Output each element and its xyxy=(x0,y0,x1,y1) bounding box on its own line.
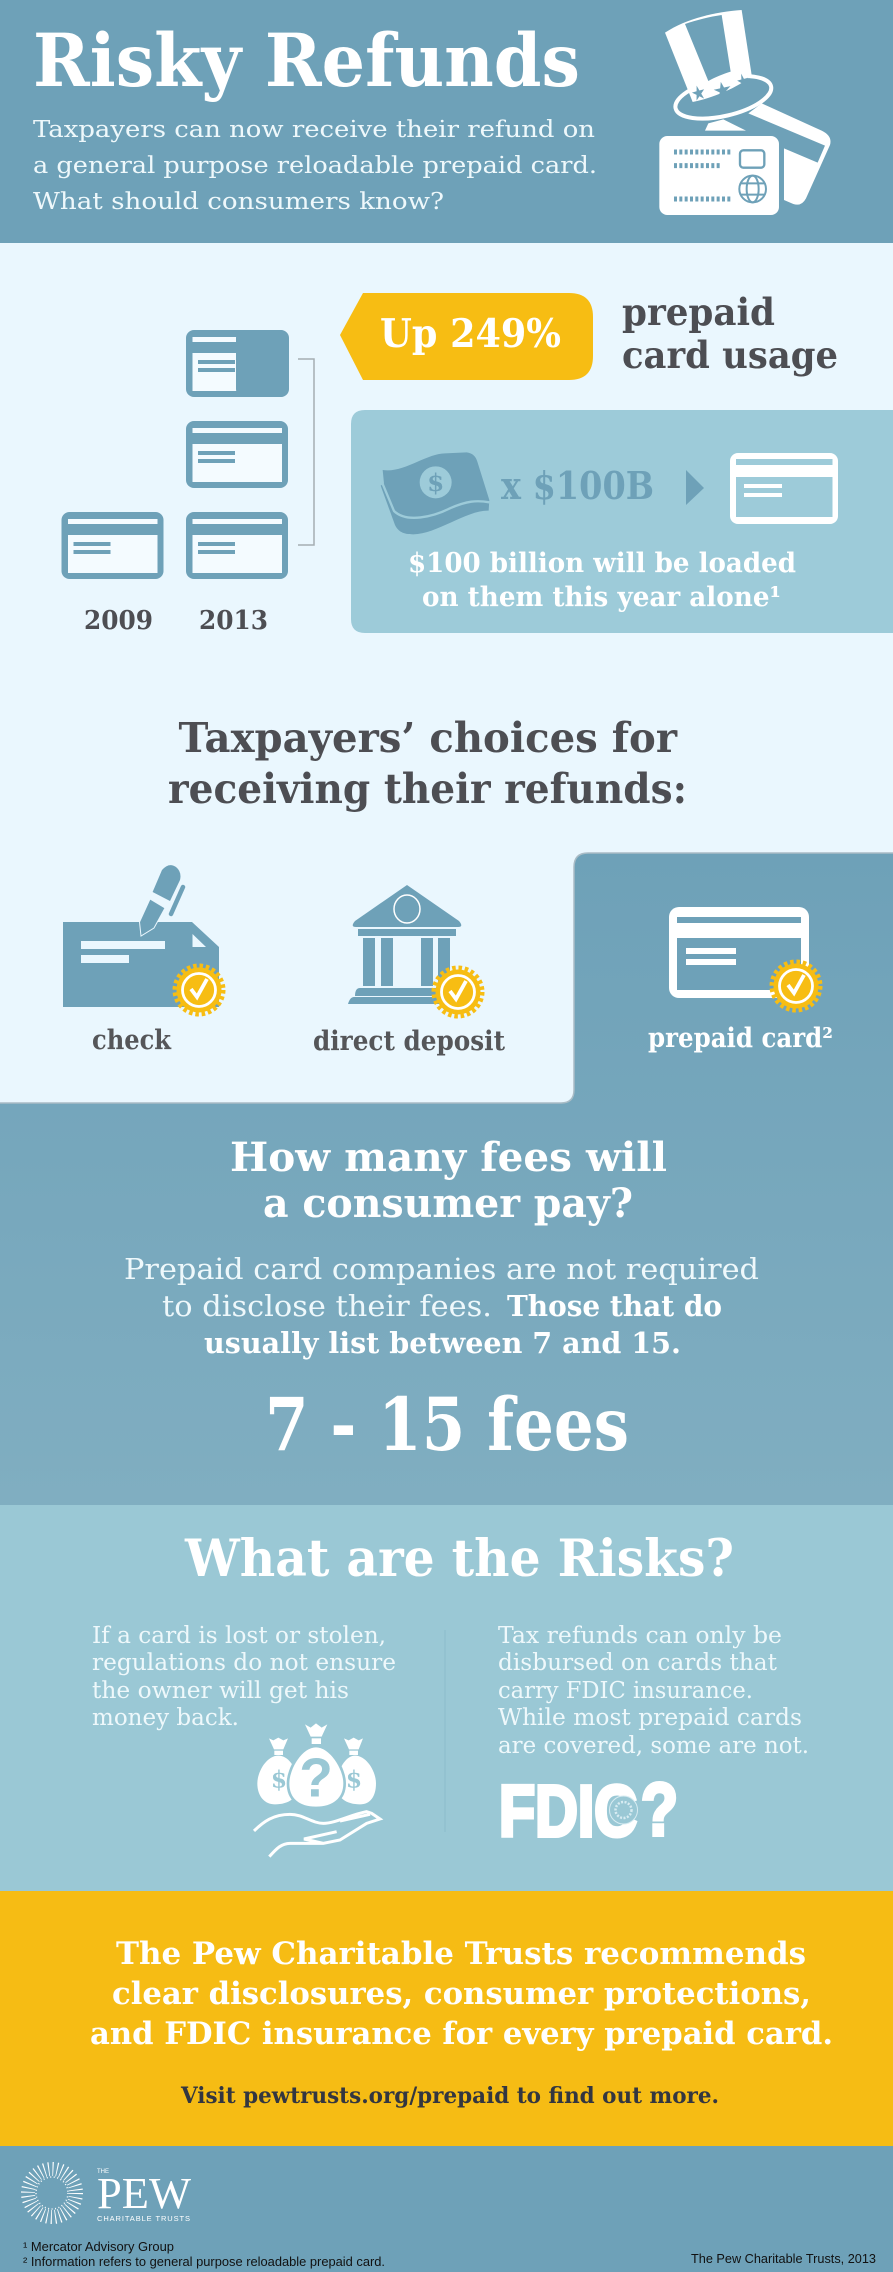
text: fdic insurance: Tax refunds can only be xyxy=(498,1623,782,1649)
panel: footer xyxy=(0,2146,893,2272)
text: fdic insurance: disbursed on cards that xyxy=(498,1650,778,1676)
panel: risks xyxy=(0,1505,893,1891)
icon: prepaid card xyxy=(669,907,820,1010)
panel: direct deposit option xyxy=(313,885,505,1057)
icon: fdic question: FDIC xyxy=(499,1772,637,1852)
text: fdic insurance xyxy=(498,1623,809,1759)
footnotes: ² Information refers to general purpose reloadable prepaid card. xyxy=(23,2255,385,2269)
panel: header xyxy=(0,0,893,243)
icon: white card xyxy=(730,453,838,524)
footnotes xyxy=(23,2240,385,2269)
chart: card growth from 2009 to 2013 xyxy=(62,330,314,636)
panel: prepaid card option xyxy=(648,907,833,1054)
text: $100 billion: $100 billion will be loaded xyxy=(408,548,796,579)
icon: card 2013 middle xyxy=(186,421,288,488)
heading: taxpayers' choices: Taxpayers’ choices for xyxy=(178,714,678,762)
intro text: Taxpayers can now receive their refund on xyxy=(33,117,595,143)
text: fee disclosure: Those that do xyxy=(507,1289,722,1323)
heading: what are the risks: What are the Risks? xyxy=(184,1529,734,1589)
heading: prepaid card usage: card usage xyxy=(622,333,838,377)
panel: fees xyxy=(124,1134,759,1468)
heading: taxpayers' choices xyxy=(168,714,687,813)
icon: card 2013 partial top xyxy=(186,330,289,397)
icon: card 2009 xyxy=(62,512,164,579)
text: fee disclosure: Prepaid card companies are not required xyxy=(124,1252,759,1286)
text: lost or stolen: money back. xyxy=(92,1705,239,1731)
icon: card 2013 bottom xyxy=(186,512,288,579)
arrow xyxy=(686,470,704,505)
heading: taxpayers' choices: receiving their refunds: xyxy=(168,765,687,813)
label: prepaid card: prepaid card² xyxy=(648,1023,833,1054)
label: check: check xyxy=(92,1025,172,1056)
text: lost or stolen: the owner will get his xyxy=(92,1678,349,1704)
logo: pew charitable trusts xyxy=(28,2169,191,2223)
text: lost or stolen: If a card is lost or stolen, xyxy=(92,1623,386,1649)
icon: money bags over hand xyxy=(254,1723,380,1857)
text: recommendation xyxy=(90,1936,833,2052)
icon: fdic question: ? xyxy=(641,1768,678,1851)
text: recommendation: The Pew Charitable Trusts recommends xyxy=(116,1936,806,1972)
text: fdic insurance: carry FDIC insurance. xyxy=(498,1678,753,1704)
text: fee disclosure xyxy=(124,1252,759,1360)
text: lost or stolen: regulations do not ensure xyxy=(92,1650,396,1676)
title: Risky Refunds xyxy=(33,18,580,104)
heading: how many fees: a consumer pay? xyxy=(263,1180,633,1227)
icon: money xyxy=(381,452,489,534)
text: x $100B: x $100B xyxy=(501,463,654,508)
text: fdic insurance: are covered, some are not. xyxy=(498,1733,809,1759)
footnotes: ¹ Mercator Advisory Group xyxy=(23,2240,174,2254)
credit: The Pew Charitable Trusts, 2013 xyxy=(691,2252,876,2266)
callout: up 249% xyxy=(340,293,593,380)
icon: money bags over hand: $ xyxy=(271,1766,287,1794)
text: lost or stolen xyxy=(92,1623,396,1731)
intro text: a general purpose reloadable prepaid card. xyxy=(33,153,597,179)
logo: pew charitable trusts: CHARITABLE TRUSTS xyxy=(97,2214,190,2223)
icon: bank xyxy=(348,885,482,1016)
icon: money: $ xyxy=(427,468,444,497)
panel: check option xyxy=(63,865,223,1056)
panel: blue background below light section xyxy=(0,853,893,1505)
icon: money bags over hand: ? xyxy=(299,1747,333,1809)
heading: prepaid card usage xyxy=(622,290,838,377)
heading: prepaid card usage: prepaid xyxy=(622,290,775,334)
bracket xyxy=(298,359,314,545)
label: direct deposit: direct deposit xyxy=(313,1026,505,1057)
text: visit link: Visit pewtrusts.org/prepaid to find out more. xyxy=(180,2083,719,2109)
intro text xyxy=(33,117,597,215)
panel: light usage and choices section xyxy=(0,243,893,1103)
label: 2009: 2009 xyxy=(84,606,153,636)
big number: 7-15 fees: 7 - 15 fees xyxy=(265,1382,629,1468)
icon: uncle sam hat and credit card xyxy=(659,10,831,215)
callout: up 249%: Up 249% xyxy=(380,311,561,357)
intro text: What should consumers know? xyxy=(33,189,444,215)
text: fee disclosure: usually list between 7 and 15. xyxy=(204,1326,681,1360)
text: $100 billion: on them this year alone¹ xyxy=(422,582,781,613)
icon: money bags over hand: $ xyxy=(346,1766,362,1794)
icon: check and pen xyxy=(63,865,223,1014)
text: fdic insurance: While most prepaid cards xyxy=(498,1705,802,1731)
text: $100 billion xyxy=(408,548,796,613)
label: 2013: 2013 xyxy=(199,606,268,636)
text: recommendation: clear disclosures, consumer protections, xyxy=(112,1976,811,2012)
panel: $100 billion loaded xyxy=(351,410,893,633)
text: recommendation: and FDIC insurance for every prepaid card. xyxy=(90,2016,833,2052)
heading: how many fees xyxy=(230,1134,667,1227)
text: fee disclosure: to disclose their fees. xyxy=(162,1289,492,1323)
heading: how many fees: How many fees will xyxy=(230,1134,667,1181)
logo: pew charitable trusts: THE xyxy=(97,2169,109,2175)
panel: recommendation xyxy=(0,1891,893,2146)
logo: pew charitable trusts: PEW xyxy=(97,2169,191,2218)
